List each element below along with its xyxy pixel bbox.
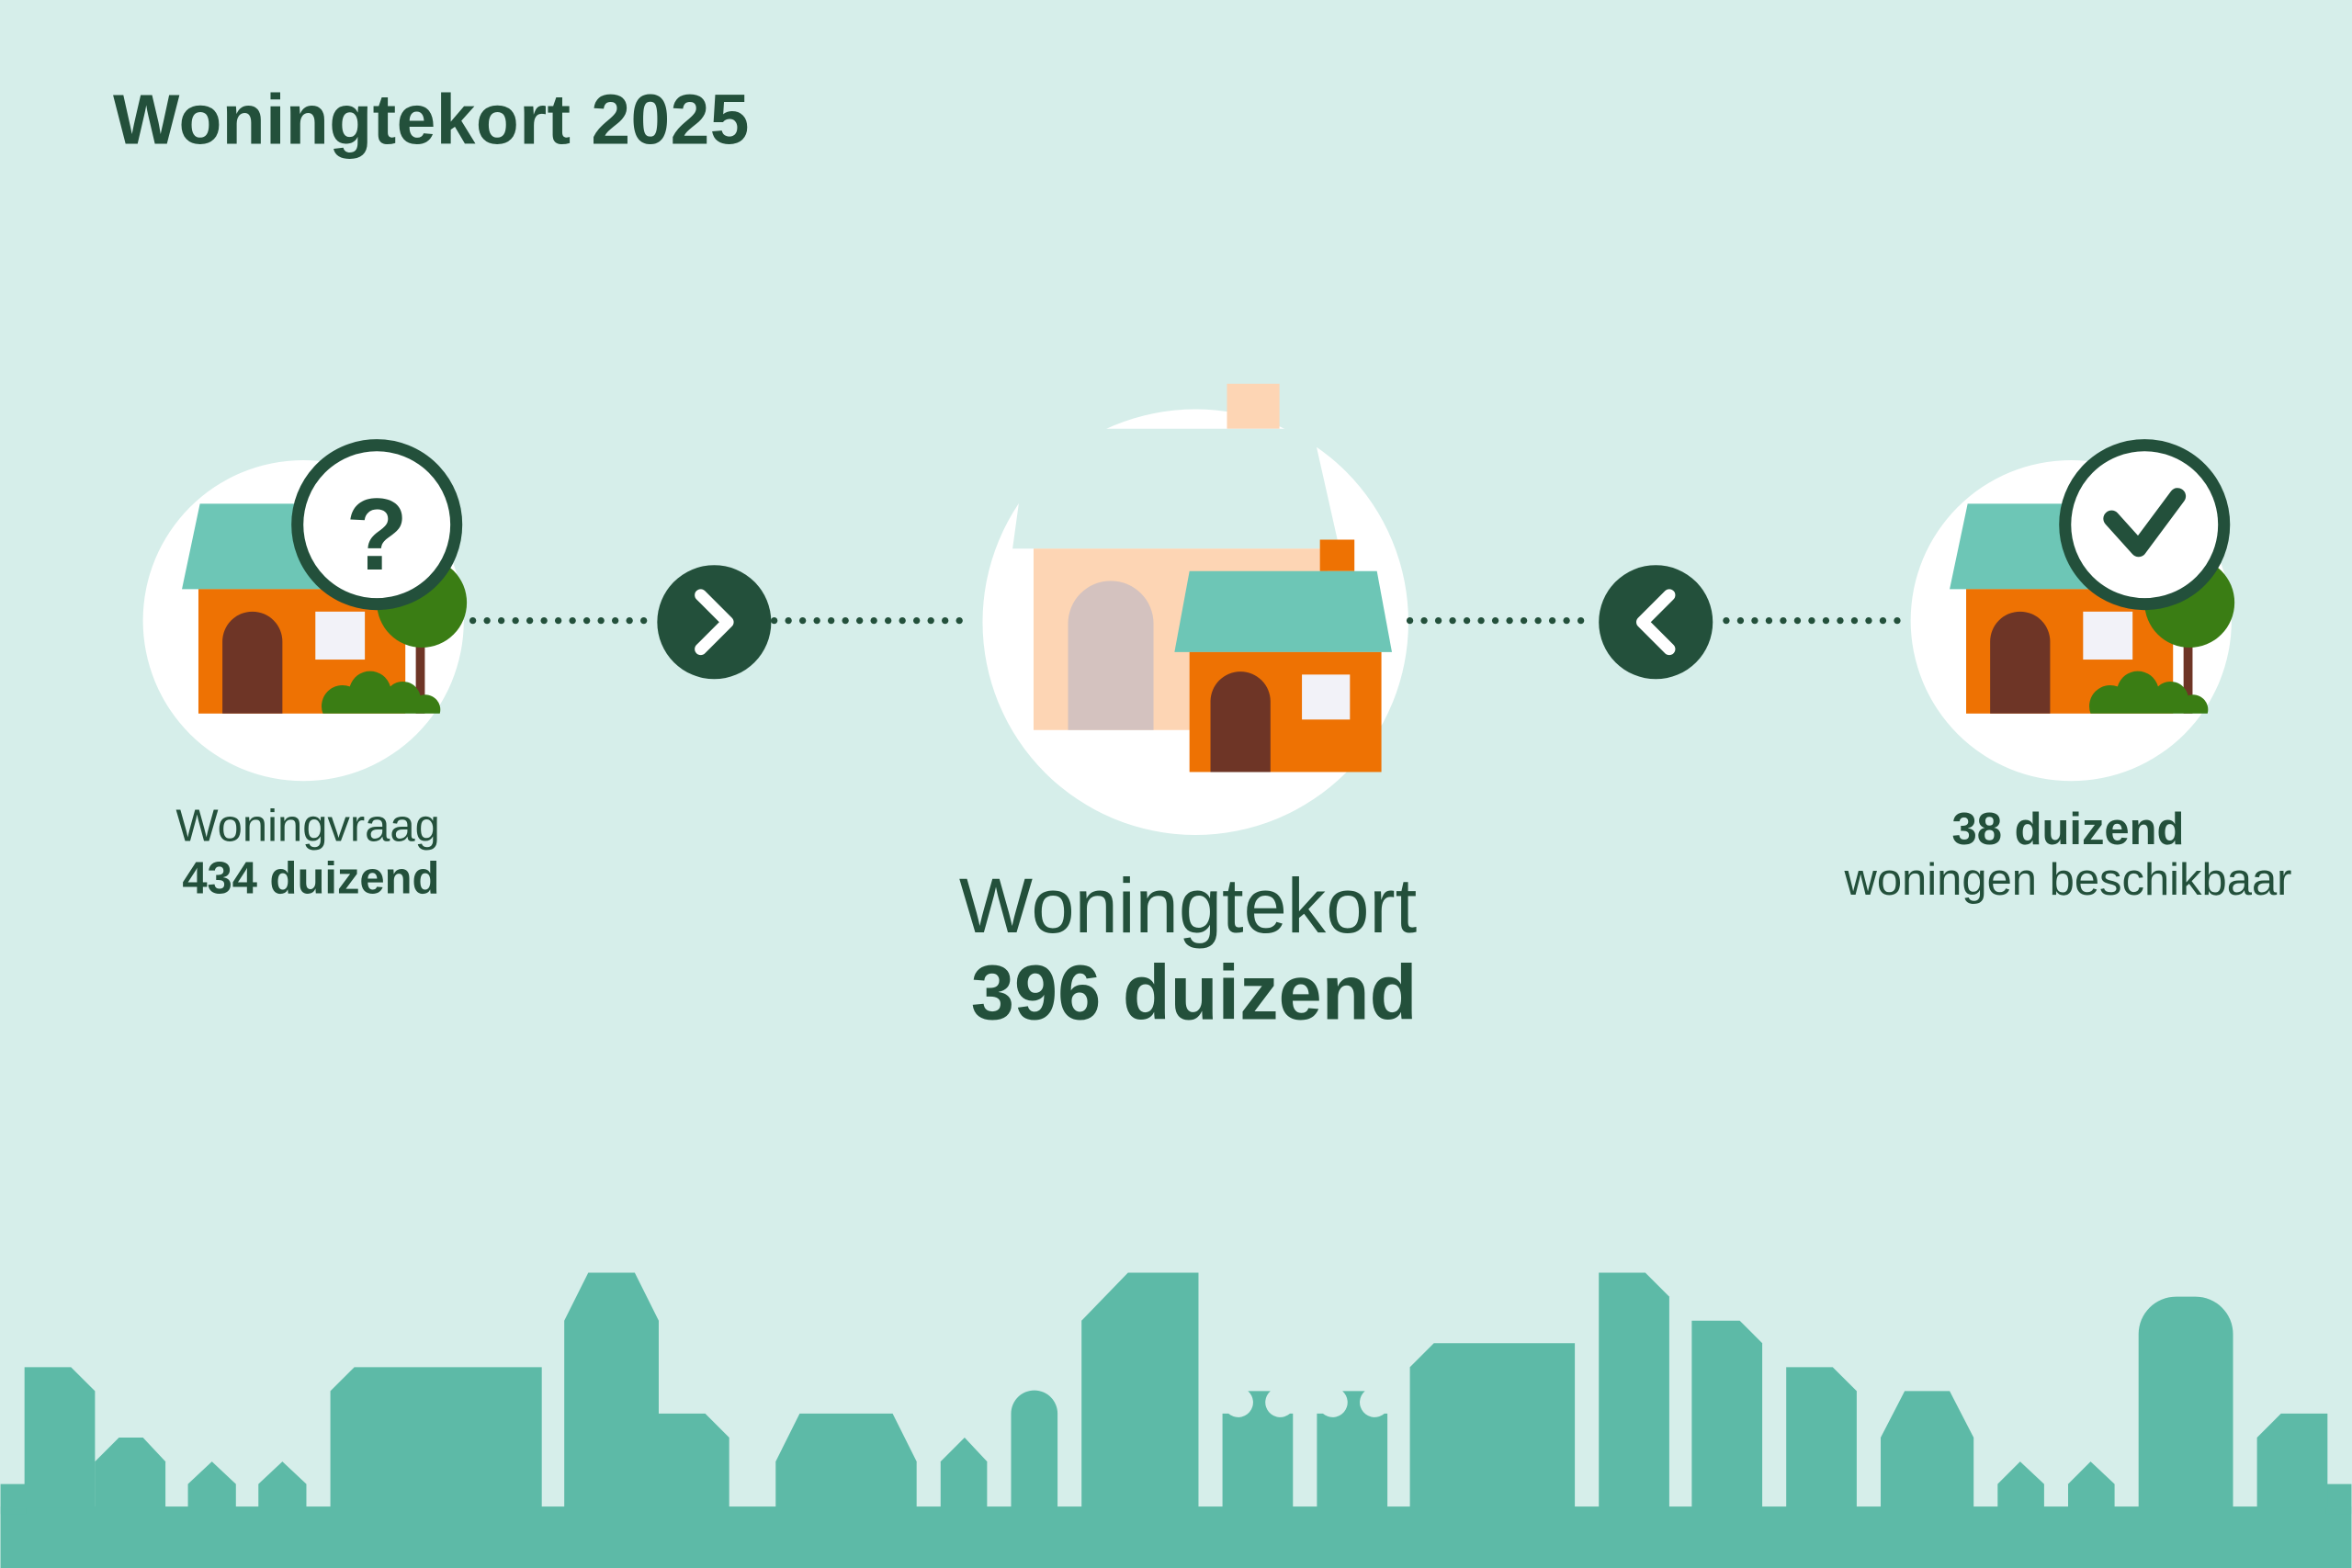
icon: check badge bbox=[2065, 446, 2224, 604]
text: woningvraag bbox=[175, 802, 440, 904]
text: woningvraag: 434 duizend bbox=[182, 854, 439, 904]
text: beschikbaar bbox=[1843, 805, 2291, 905]
arrow: right chevron bbox=[657, 565, 771, 679]
dotted line right bbox=[1410, 618, 1594, 623]
arrow: left chevron bbox=[1599, 565, 1713, 679]
skyline bbox=[1, 1273, 2351, 1568]
text: beschikbaar: 38 duizend bbox=[1952, 805, 2184, 854]
panel: beschikbaar house icon bbox=[1911, 446, 2234, 781]
text: woningtekort bbox=[959, 862, 1417, 1036]
text: woningtekort: Woningtekort bbox=[959, 862, 1417, 949]
text: woningvraag: Woningvraag bbox=[175, 802, 440, 852]
panel: woningvraag house icon bbox=[143, 446, 467, 781]
dotted line left bbox=[473, 618, 654, 623]
text: woningtekort: 396 duizend bbox=[971, 949, 1417, 1036]
icon: question badge bbox=[298, 446, 457, 604]
text: beschikbaar: woningen beschikbaar bbox=[1843, 855, 2291, 905]
icon: question badge: ? bbox=[345, 478, 408, 592]
panel: center woningtekort icon bbox=[982, 384, 1408, 835]
title: Woningtekort 2025 bbox=[113, 82, 750, 160]
